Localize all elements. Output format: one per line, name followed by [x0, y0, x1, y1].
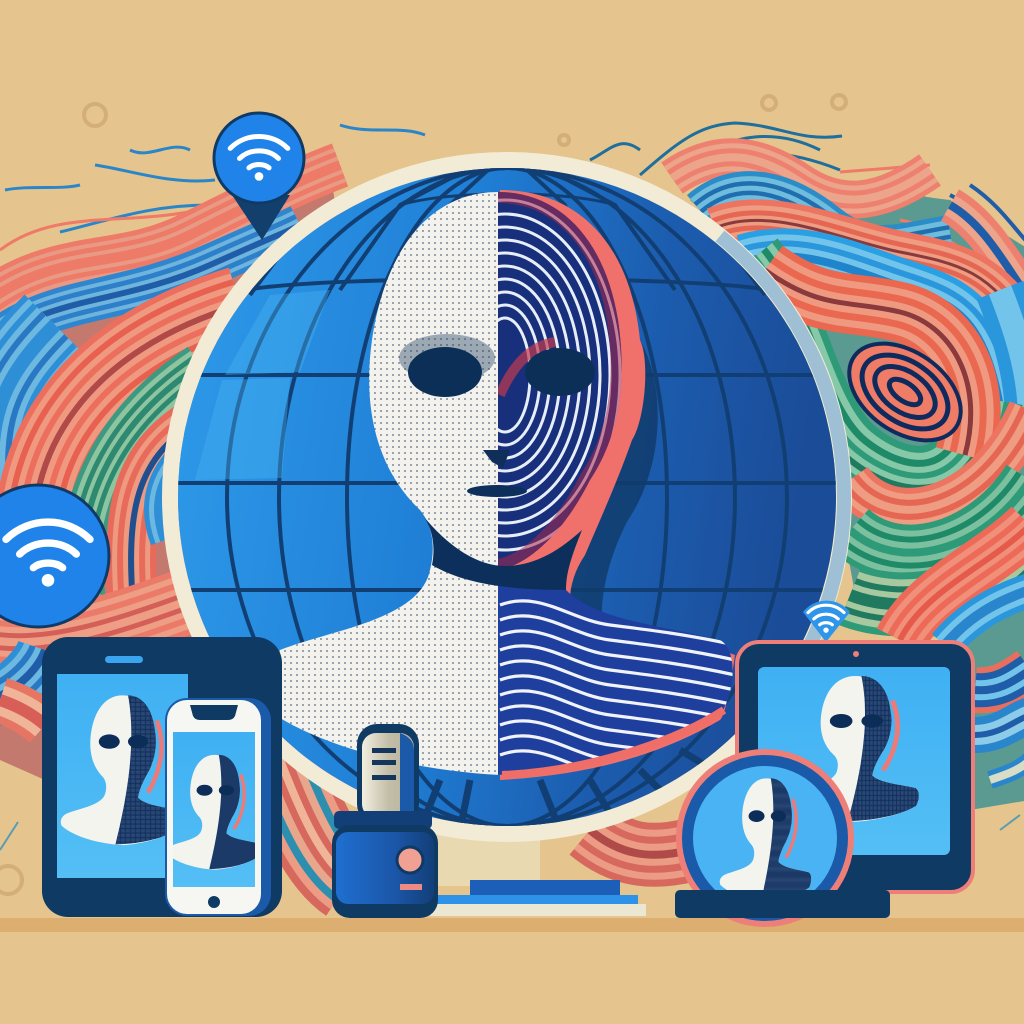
circular stand device [675, 752, 890, 924]
dark drop shadow [568, 340, 658, 622]
wave field: bottom centre [280, 760, 690, 880]
wave field: left [0, 125, 425, 780]
tablet [737, 642, 973, 892]
chin shadow [420, 512, 582, 590]
eyes [408, 347, 482, 397]
contour-line right half of face [498, 192, 622, 566]
mouth [467, 485, 527, 497]
decorative small rings and marks [0, 95, 1020, 894]
stippled left half [251, 192, 500, 775]
globe [170, 160, 844, 834]
wave field: right [590, 123, 1024, 810]
microphone device [332, 724, 438, 918]
floor strip [0, 918, 1024, 932]
wifi pin top [214, 113, 304, 240]
eye shading [399, 334, 495, 382]
globe monitor stand [430, 826, 646, 916]
wifi small right [803, 601, 850, 642]
nose [483, 450, 510, 468]
wifi badge left [0, 485, 109, 627]
coral shadow [500, 190, 735, 780]
back phone [42, 637, 282, 917]
human bust [251, 190, 738, 780]
fingerprint whorl [831, 324, 979, 460]
front phone [165, 698, 271, 916]
globe grid [178, 168, 840, 830]
coral underside [502, 710, 724, 775]
contour-line right half of body [498, 585, 738, 780]
